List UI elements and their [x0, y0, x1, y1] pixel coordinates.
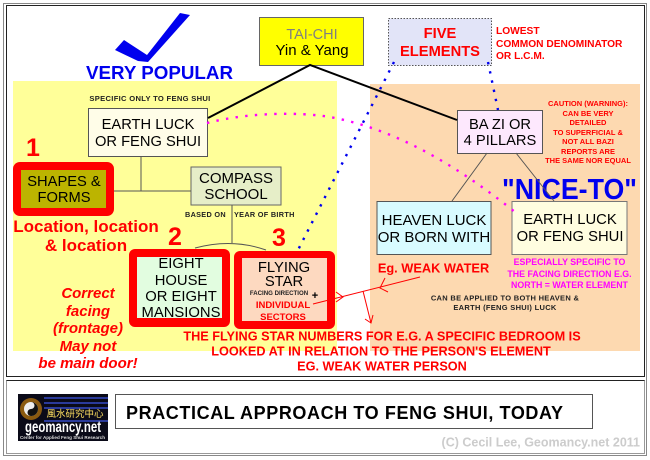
number 1: 1 [26, 134, 40, 162]
icon: blue check mark [115, 13, 190, 62]
box: Heaven Luck or Born With: OR BORN WITH [378, 229, 490, 246]
text: flying star numbers explanation: EG. WEAK WATER PERSON [297, 360, 467, 374]
note: correct facing: (frontage) [53, 320, 123, 337]
box: Earth Luck or Feng Shui: EARTH LUCK [102, 117, 195, 133]
logo: geomancy.net: geomancy.net [25, 419, 101, 436]
title box: PRACTICAL APPROACH TO FENG SHUI, TODAY [126, 403, 563, 423]
copyright: (C) Cecil Lee, Geomancy.net 2011 [442, 436, 640, 450]
text: location, location & location [13, 217, 159, 255]
callout: lowest common denominator: OR L.C.M. [496, 51, 545, 62]
box: Tai-Chi: TAI-CHI [286, 27, 338, 43]
label: based on year of birth [185, 210, 295, 219]
box: Shapes & Forms: FORMS [37, 190, 91, 206]
box: Flying Star [234, 251, 335, 329]
text: flying star numbers explanation [183, 330, 581, 374]
label: based on year of birth: YEAR OF BIRTH [234, 210, 295, 219]
callout: lowest common denominator [496, 26, 623, 62]
heading: nice-to: "NICE-TO" [502, 174, 637, 206]
heading: very popular: VERY POPULAR [86, 62, 233, 83]
box: Earth Luck or Feng Shui (right): EARTH LUCK [523, 212, 617, 228]
box: Earth Luck or Feng Shui (right) [512, 202, 627, 254]
title box [116, 394, 592, 428]
connector: black lines from Tai-Chi [208, 65, 457, 120]
text: especially specific: ESPECIALLY SPECIFIC TO [514, 257, 626, 267]
box: Eight House or Eight Mansions: OR EIGHT [145, 289, 217, 305]
box: Heaven Luck or Born With [377, 202, 491, 254]
arrows: red sector pointers [313, 277, 420, 323]
callout: caution warning: NOT ALL BAZI [562, 137, 614, 146]
label: based on year of birth: BASED ON [185, 210, 226, 219]
callout: caution warning: CAUTION (WARNING): [548, 99, 628, 108]
box: Flying Star: STAR [265, 274, 303, 290]
note: correct facing: May not [60, 338, 117, 355]
box: Flying Star: + [312, 290, 318, 302]
box: Heaven Luck or Born With: HEAVEN LUCK [382, 212, 486, 229]
box: Eight House or Eight Mansions: EIGHT [158, 256, 204, 272]
callout: caution warning: DETAILED [570, 118, 607, 127]
box: Earth Luck or Feng Shui (right): OR FENG SHUI [517, 229, 623, 245]
box: Shapes & Forms: SHAPES & [27, 174, 101, 190]
callout: caution warning: TO SUPERFICIAL & [553, 128, 623, 137]
text: especially specific: THE FACING DIRECTION E.G. [507, 269, 632, 279]
box: Tai-Chi: Yin & Yang [275, 42, 349, 59]
connectors: tree lines [114, 153, 554, 250]
callout: caution warning: CAN BE VERY [563, 109, 613, 118]
box: Five Elements: ELEMENTS [400, 44, 480, 60]
text: location, location & location: Location, location [13, 217, 159, 236]
box: Eight House or Eight Mansions: HOUSE [155, 273, 207, 289]
connector: blue dotted lines from Five Elements [298, 62, 498, 250]
text: can be applied: EARTH (FENG SHUI) LUCK [453, 303, 557, 312]
box: Compass School [191, 167, 281, 205]
text: eg weak water: Eg. WEAK WATER [378, 260, 489, 276]
note: correct facing: Correct [61, 285, 116, 302]
callout: caution warning: THE SAME NOR EQUAL [545, 156, 631, 165]
text: especially specific [507, 257, 632, 290]
callout: caution warning: REPORTS ARE [561, 147, 615, 156]
box: Flying Star: INDIVIDUAL [256, 300, 310, 311]
note: correct facing: be main door! [38, 355, 138, 372]
label: specific only to feng shui: SPECIFIC ONLY TO FENG SHUI [89, 94, 211, 103]
text: can be applied [431, 294, 579, 312]
panel: nice-to background [370, 84, 640, 351]
text: flying star numbers explanation: THE FLYING STAR NUMBERS FOR E.G. A SPECIFIC BEDROOM IS [183, 330, 581, 344]
text: can be applied: CAN BE APPLIED TO BOTH HEAVEN & [431, 294, 579, 302]
box: Ba Zi or 4 Pillars: BA ZI OR [469, 117, 531, 133]
box: Eight House or Eight Mansions: MANSIONS [142, 305, 221, 321]
number 3: 3 [272, 224, 286, 252]
box: Five Elements: FIVE [424, 26, 457, 42]
logo: geomancy.net: 風水研究中心 [46, 408, 104, 420]
text: especially specific: NORTH = WATER ELEMENT [511, 280, 629, 290]
box: Ba Zi or 4 Pillars [458, 110, 542, 154]
box: Earth Luck or Feng Shui [88, 108, 208, 156]
box: Five Elements [388, 18, 492, 66]
box: Flying Star: FACING DIRECTION [250, 290, 308, 297]
box: Shapes & Forms [13, 162, 114, 216]
logo: geomancy.net: Center for Applied Feng Shui Research [20, 435, 105, 440]
box: Eight House or Eight Mansions [129, 249, 230, 327]
connector: magenta dotted earth luck link [207, 114, 515, 212]
box: Ba Zi or 4 Pillars: 4 PILLARS [464, 133, 537, 149]
box: Tai-Chi [260, 18, 364, 66]
panel: very popular background [13, 81, 337, 351]
text: flying star numbers explanation: LOOKED AT IN RELATION TO THE PERSON'S ELEMENT [211, 344, 551, 358]
box: Flying Star: FLYING [258, 260, 310, 276]
number 2: 2 [168, 223, 182, 251]
note: correct facing: facing [66, 303, 110, 320]
callout: lowest common denominator: LOWEST [496, 26, 540, 37]
note: correct facing [38, 285, 138, 372]
box: Compass School: COMPASS [199, 170, 273, 187]
text: location, location & location: & location [45, 236, 127, 255]
box: Compass School: SCHOOL [204, 186, 268, 203]
box: Flying Star: SECTORS [260, 312, 306, 323]
callout: caution warning [545, 99, 631, 165]
box: Earth Luck or Feng Shui: OR FENG SHUI [95, 134, 201, 150]
logo: geomancy.net [18, 394, 108, 441]
callout: lowest common denominator: COMMON DENOMINATOR [496, 39, 623, 50]
